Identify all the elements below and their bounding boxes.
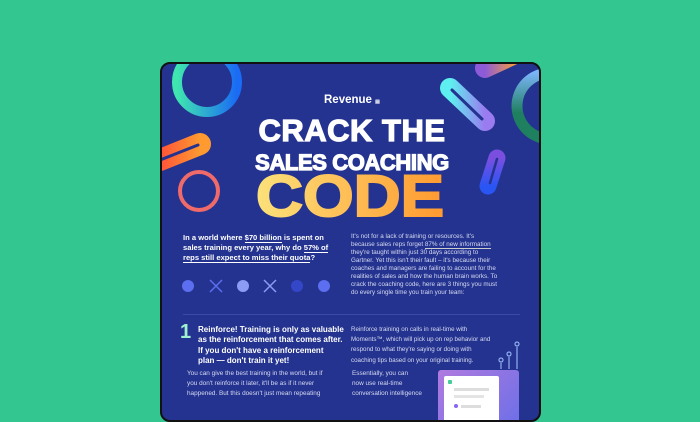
icon: sliders	[498, 341, 520, 369]
intro paragraph: because sales reps forget 87% of new information	[351, 241, 491, 248]
dots row	[182, 280, 330, 292]
intro paragraph: coaches and managers are failing to account for the	[351, 265, 496, 272]
section 1 heading: plan — don't train it yet!	[198, 356, 289, 365]
intro paragraph: realities of sales and how the human brain works. To	[351, 273, 497, 280]
section 1 heading: as the reinforcement that comes after.	[198, 335, 342, 344]
intro paragraph: It's not for a lack of training or resources. It's	[351, 233, 474, 240]
section 1 heading: If you don't have a reinforcement	[198, 346, 323, 355]
section 1 right text: coaching tips based on your original training.	[351, 357, 473, 364]
card: infographic	[160, 62, 541, 422]
title: SALES COACHING	[255, 150, 449, 175]
section 1 heading	[198, 325, 344, 365]
intro question: sales training every year, why do 57% of	[183, 243, 328, 252]
intro question: In a world where $70 billion is spent on	[183, 233, 324, 242]
number 1: 1	[180, 321, 191, 343]
intro paragraph: crack the coaching code, here are 3 things you must	[351, 281, 497, 288]
section 1 right text 2: conversation intelligence	[352, 390, 422, 397]
section 1 heading: Reinforce! Training is only as valuable	[198, 325, 344, 334]
section 1 body: happened. But this doesn't just mean repeating	[187, 390, 320, 397]
section 1 body: You can give the best training in the world, but if	[187, 370, 322, 377]
intro paragraph: do every single time you train your team:	[351, 289, 464, 296]
section 1 right text 2: Essentially, you can	[352, 370, 408, 377]
decorative shapes	[162, 64, 539, 229]
intro question	[183, 233, 328, 263]
intro question: reps still expect to miss their quota?	[183, 253, 315, 262]
title CODE: CODE	[256, 164, 444, 229]
divider	[183, 314, 520, 315]
screenshot panel	[438, 370, 519, 422]
section 1 right text: Reinforce training on calls in real-time with	[351, 326, 467, 333]
section 1 right text 2: now use real-time	[352, 380, 402, 387]
section 1 body: you don't reinforce it later, it'll be as if it never	[187, 380, 314, 387]
logo: Revenue ▤	[324, 94, 380, 106]
intro paragraph	[351, 233, 497, 296]
intro paragraph: they're taught within just 30 days according to	[351, 249, 478, 256]
intro paragraph: Gartner. Yet this isn't their fault – it's because their	[351, 257, 490, 264]
section 1 right text: Moments™, which will pick up on rep behavior and	[351, 336, 490, 343]
title: CRACK THE	[258, 113, 446, 148]
section 1 body	[187, 370, 323, 397]
title	[255, 113, 449, 175]
section 1 right text 2	[352, 370, 422, 397]
section 1 right text: respond to what they're saying or doing with	[351, 346, 472, 353]
section 1 right text	[351, 326, 490, 364]
